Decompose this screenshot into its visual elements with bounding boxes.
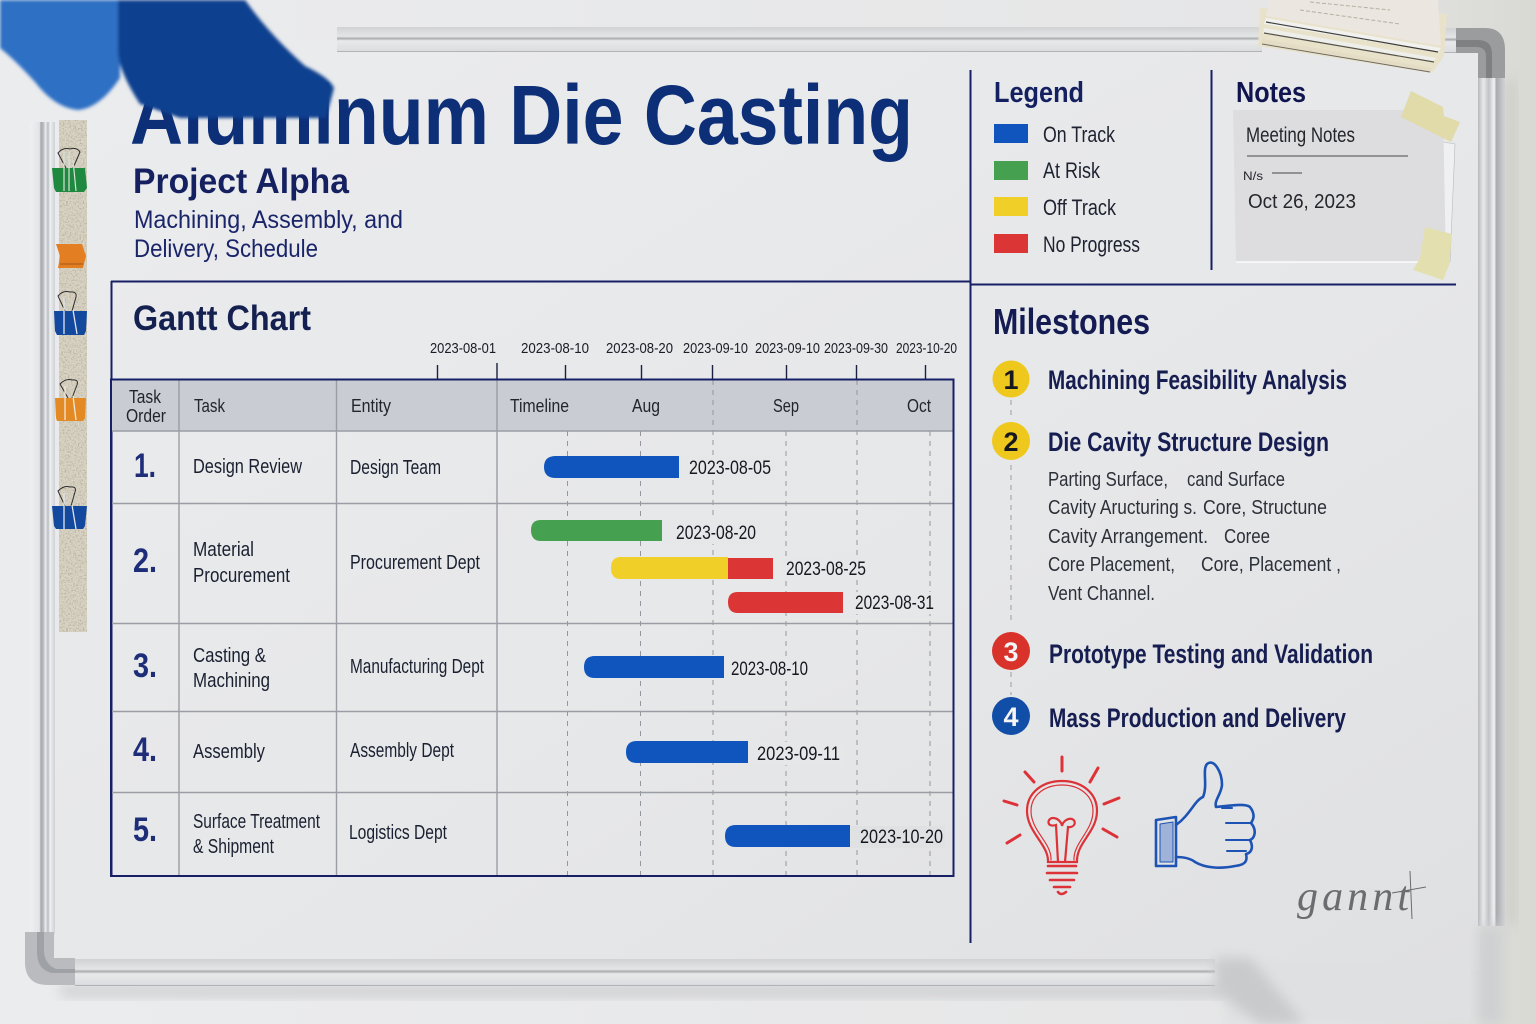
- note date: Oct 26, 2023: [1248, 191, 1356, 213]
- milestones panel: [992, 301, 1373, 735]
- milestone 2 details: cand Surface: [1187, 469, 1285, 491]
- row 3: casting and machining: 2023-08-10: [731, 659, 808, 680]
- row 5: surface treatment: Logistics Dept: [349, 822, 447, 844]
- table grid: [112, 380, 953, 876]
- clip: orange no handle: [56, 244, 86, 268]
- timeline date axis: 2023-09-10: [755, 340, 820, 357]
- timeline date axis: 2023-08-01: [430, 340, 496, 357]
- legend: no progress: No Progress: [1043, 232, 1140, 257]
- row 2: material procurement: Procurement Dept: [350, 552, 480, 574]
- row 5: surface treatment: & Shipment: [193, 836, 274, 858]
- timeline date axis: 2023-08-10: [521, 340, 589, 357]
- milestone connector: [1010, 400, 1012, 695]
- legend: off track: [994, 195, 1117, 220]
- header labels: Task: [129, 387, 162, 407]
- timeline date axis: 2023-08-20: [606, 340, 673, 357]
- row 5: surface treatment: Surface Treatment: [193, 811, 320, 833]
- row 5: surface treatment: 5.: [133, 811, 157, 849]
- notes heading: Notes: [1236, 77, 1306, 109]
- milestone 2 details: Coree: [1224, 526, 1270, 548]
- row 2: material procurement: 2023-08-25: [786, 559, 866, 580]
- header labels: Oct: [907, 396, 931, 416]
- description: [134, 206, 403, 263]
- legend: off track: Off Track: [1043, 195, 1117, 220]
- legend: no progress: [994, 232, 1140, 257]
- clip: orange: [55, 380, 86, 421]
- row 5: surface treatment: 2023-10-20: [860, 827, 943, 848]
- milestone 2: Die Cavity Structure Design: [1048, 427, 1329, 457]
- masking tape bottom: [1413, 227, 1452, 280]
- milestone 3: 3: [1003, 637, 1019, 667]
- legend: [994, 77, 1140, 257]
- header labels: Aug: [632, 396, 660, 416]
- clip: blue lower: [52, 486, 87, 529]
- legend: at risk: At Risk: [1043, 158, 1101, 183]
- milestone 2: 2: [1003, 427, 1019, 457]
- notes paper: N/s: [1243, 169, 1263, 183]
- handwritten word: gannt: gannt: [1297, 874, 1410, 920]
- paper stack: [1258, 0, 1447, 73]
- clip: blue: [54, 292, 87, 335]
- row 4: assembly: 2023-09-11: [757, 744, 840, 765]
- vertical timeline gridlines: [568, 380, 930, 876]
- legend: on track: On Track: [1043, 122, 1116, 147]
- milestone 4: Mass Production and Delivery: [1049, 703, 1346, 733]
- clip: green: [52, 148, 87, 192]
- milestones heading: Milestones: [993, 301, 1150, 342]
- row 4: assembly: Assembly: [193, 741, 265, 763]
- timeline date axis: 2023-09-10: [683, 340, 748, 357]
- masking tape top: [1401, 91, 1460, 142]
- milestone 1: [992, 360, 1347, 398]
- icon: light bulb: [1004, 757, 1119, 894]
- milestone 2 details: Vent Channel.: [1048, 583, 1155, 605]
- timeline date axis: 2023-10-20: [896, 340, 957, 357]
- milestone 1: Machining Feasibility Analysis: [1048, 365, 1347, 395]
- timeline date axis: 2023-09-30: [824, 340, 888, 357]
- milestone 2 details: Cavity Aructuring s.: [1048, 497, 1197, 519]
- milestone 4: [992, 697, 1346, 735]
- timeline date axis: [430, 340, 957, 380]
- header labels: Entity: [351, 396, 391, 416]
- section divider lines: [111, 70, 1456, 943]
- milestone 2 details: Core Placement,: [1048, 554, 1175, 576]
- row 2: material procurement: [133, 520, 937, 614]
- header labels: Task: [194, 396, 226, 416]
- row 3: casting and machining: 3.: [133, 647, 157, 685]
- legend heading: Legend: [994, 77, 1084, 109]
- milestone 2 details: Core, Structune: [1203, 497, 1327, 519]
- row 1: design review: 2023-08-05: [689, 458, 771, 479]
- gantt chart heading: Gantt Chart: [133, 299, 311, 338]
- row 2: material procurement: Procurement: [193, 565, 290, 587]
- icon: blurred blue marker blobs: [0, 0, 334, 118]
- milestone 2 details: [1048, 469, 1341, 605]
- row 1: design review: [134, 447, 775, 485]
- subtitle: Project Alpha: [133, 162, 350, 201]
- legend: on track: [994, 122, 1116, 147]
- milestone 2 details: Core, Placement ,: [1201, 554, 1341, 576]
- notes paper: [1233, 91, 1460, 280]
- milestone 3: Prototype Testing and Validation: [1049, 639, 1373, 669]
- milestone 2 details: Cavity Arrangement.: [1048, 526, 1208, 548]
- row 4: assembly: [133, 731, 844, 769]
- row 2: material procurement: Material: [193, 539, 254, 561]
- table header row: [112, 380, 953, 431]
- row 1: design review: Design Team: [350, 457, 441, 479]
- title: Aluminum Die Casting: [130, 68, 913, 162]
- row 3: casting and machining: Machining: [193, 670, 270, 692]
- header labels: [126, 387, 931, 426]
- row 3: casting and machining: [133, 645, 812, 692]
- header labels: Timeline: [510, 396, 569, 416]
- description: Delivery, Schedule: [134, 235, 318, 263]
- row 2: material procurement: 2023-08-20: [676, 523, 756, 544]
- milestone 1: 1: [1003, 365, 1019, 395]
- row 4: assembly: 4.: [133, 731, 157, 769]
- row 4: assembly: Assembly Dept: [350, 740, 454, 762]
- description: Machining, Assembly, and: [134, 206, 403, 234]
- table outline: [111, 380, 954, 876]
- row 3: casting and machining: Manufacturing Dept: [350, 656, 484, 678]
- header labels: Order: [126, 406, 166, 426]
- header labels: Sep: [773, 396, 799, 416]
- milestone 2: [992, 422, 1329, 460]
- row 3: casting and machining: Casting &: [193, 645, 267, 667]
- row 1: design review: 1.: [134, 447, 156, 485]
- gantt table: [111, 380, 954, 876]
- note text: Meeting Notes: [1246, 124, 1355, 147]
- row 2: material procurement: 2.: [133, 542, 157, 580]
- milestone 4: 4: [1003, 702, 1019, 732]
- legend: at risk: [994, 158, 1101, 183]
- row 1: design review: Design Review: [193, 456, 302, 478]
- row 5: surface treatment: [133, 811, 945, 858]
- milestone 3: [992, 632, 1373, 670]
- icon: thumbs up: [1156, 763, 1255, 868]
- milestone 2 details: Parting Surface,: [1048, 469, 1168, 491]
- row 2: material procurement: 2023-08-31: [855, 593, 934, 614]
- paper strip with binder clips: [52, 120, 87, 632]
